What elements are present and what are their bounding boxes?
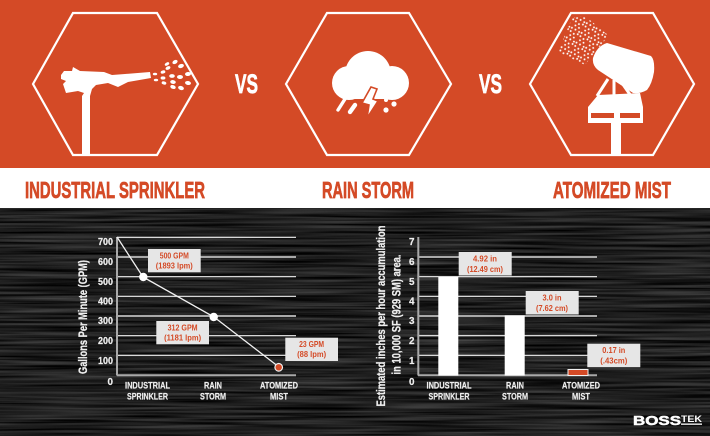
callout: 500 GPM: (1893 lpm) (156, 260, 193, 270)
category labels: RAIN (506, 380, 524, 392)
category labels: RAIN (204, 380, 222, 392)
category labels: INDUSTRIAL (125, 380, 170, 392)
axis numbers: 500 (98, 276, 113, 288)
axis numbers: 7 (409, 236, 415, 248)
callout: 0.17 in (587, 344, 640, 367)
label: vs right: VS (479, 69, 502, 99)
callout: 0.17 in: 0.17 in (602, 345, 625, 355)
hexagon: atomized mist (530, 13, 694, 155)
hexagon: industrial sprinkler (33, 13, 198, 155)
label: vs left: VS (235, 69, 258, 99)
axis title: Estimated inches per hour accumulation (374, 226, 388, 406)
axis title (374, 226, 404, 406)
axis numbers: 200 (98, 335, 113, 347)
callout: 23 GPM: 23 GPM (299, 339, 324, 349)
category labels (125, 380, 298, 402)
icon: mist cannon (558, 16, 654, 155)
category labels: MIST (572, 392, 590, 402)
logo: BossTek: BOSS (633, 413, 681, 428)
callout: 4.92 in: 4.92 in (473, 254, 497, 264)
callout: 3.0 in: (7.62 cm) (536, 303, 568, 313)
axis numbers: 400 (98, 296, 113, 308)
callout: 312 GPM (156, 321, 209, 344)
bar chart: inches per hour accumulation (374, 226, 640, 406)
axis numbers: 0 (108, 376, 113, 388)
axis numbers: 5 (409, 276, 415, 288)
title: rain storm: RAIN STORM (322, 177, 414, 203)
category labels: INDUSTRIAL (426, 380, 472, 392)
axis title: in 10,000 SF (929 SM) area. (390, 254, 404, 374)
axis numbers: 4 (409, 296, 415, 308)
callout: 23 GPM (285, 338, 338, 361)
callout: 0.17 in: (.43cm) (600, 356, 627, 366)
title: industrial sprinkler: INDUSTRIAL SPRINKLER (25, 177, 205, 203)
callout: 23 GPM: (88 lpm) (297, 349, 326, 359)
axis numbers: 600 (98, 256, 113, 268)
callout: 500 GPM: 500 GPM (160, 250, 189, 260)
panel: white title band (0, 168, 710, 208)
category labels (426, 380, 600, 402)
callout: 3.0 in (526, 291, 579, 314)
category labels: STORM (200, 392, 226, 402)
callout: 3.0 in: 3.0 in (542, 292, 562, 302)
axis title: Gallons Per Minute (GPM) (76, 260, 90, 374)
axis numbers: 100 (98, 355, 113, 367)
axis numbers: 700 (98, 236, 113, 248)
category labels: SPRINKLER (127, 392, 168, 402)
panel: brushed black background (0, 208, 710, 436)
category labels: ATOMIZED (562, 380, 600, 392)
axis numbers (98, 236, 113, 388)
category labels: STORM (502, 392, 528, 402)
logo: BossTek: TEK (681, 414, 703, 424)
callout: 4.92 in (459, 252, 512, 276)
callout: 312 GPM: 312 GPM (168, 322, 198, 332)
axis numbers: 2 (409, 335, 415, 347)
axis numbers: 300 (98, 315, 113, 327)
axis numbers: 3 (409, 315, 415, 327)
callout: 4.92 in: (12.49 cm) (467, 264, 503, 274)
axis numbers (409, 236, 415, 388)
category labels: MIST (270, 392, 288, 402)
line chart: gallons per minute (76, 236, 338, 402)
axis numbers: 0 (409, 376, 415, 388)
callout: 312 GPM: (1181 lpm) (164, 332, 201, 342)
callout: 500 GPM (148, 249, 201, 272)
data line (117, 237, 279, 367)
data points (139, 273, 283, 371)
bars (438, 277, 588, 376)
icon: sprinkler (61, 59, 191, 155)
panel: orange header (0, 0, 710, 168)
axis numbers: 1 (409, 355, 415, 367)
axis numbers: 6 (409, 256, 415, 268)
category labels: ATOMIZED (260, 380, 298, 392)
category labels: SPRINKLER (428, 392, 470, 402)
logo: BossTek (633, 413, 703, 428)
hexagon: rain storm (286, 13, 451, 155)
icon: storm cloud (332, 51, 409, 118)
